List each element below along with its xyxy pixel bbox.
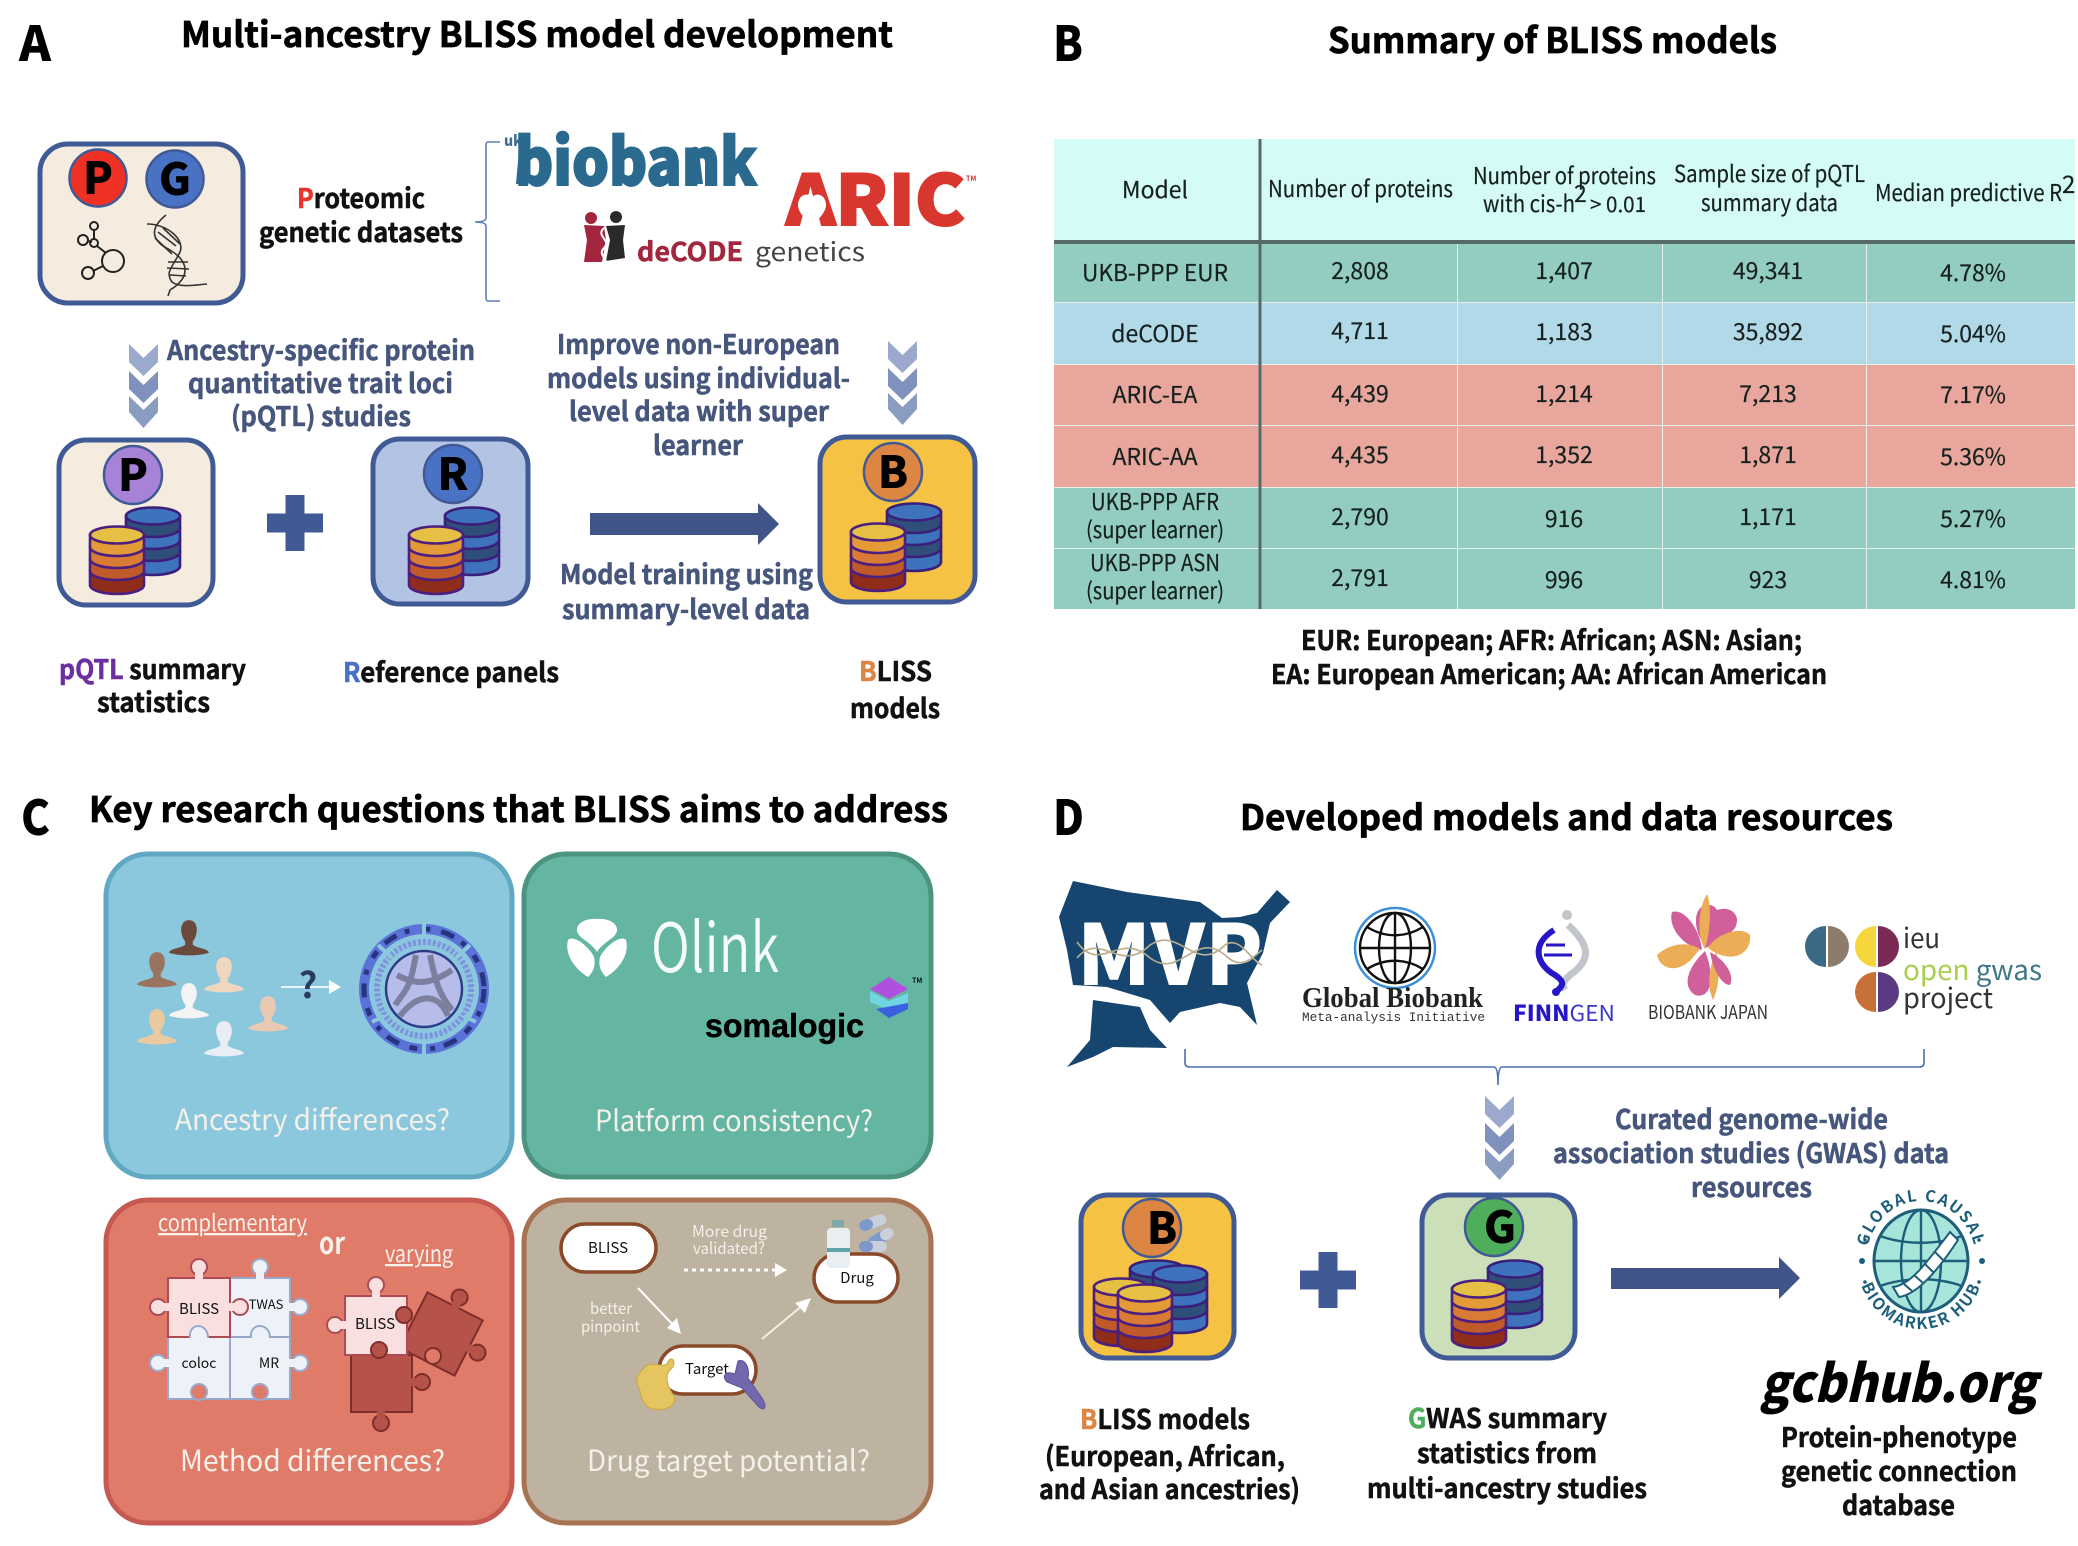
logo: ARIC: TM	[966, 174, 976, 184]
row ARIC-EA: 7.17%	[1940, 376, 2006, 410]
row UKB-PPP ASN: 996	[1545, 561, 1583, 595]
complementary label: complementary	[158, 1204, 307, 1238]
more drug validated label: More drug	[692, 1218, 767, 1242]
label: pQTL summary statistics	[59, 648, 246, 720]
chevrons down	[1485, 1096, 1514, 1180]
row UKB-PPP ASN: 4.81%	[1940, 561, 2006, 595]
row UKB-PPP EUR: 49,341	[1733, 252, 1803, 286]
logo: Olink: Olink	[651, 893, 779, 992]
database description: database	[1842, 1484, 1955, 1523]
logo: Global Causal Biomarker Hub	[1858, 1190, 1985, 1330]
dashed arrow	[684, 1263, 787, 1277]
row UKB-PPP AFR: 1,171	[1739, 498, 1797, 532]
more drug validated label: validated?	[693, 1235, 765, 1259]
panel D: models and resources	[1039, 779, 2043, 1523]
row UKB-PPP AFR	[1086, 483, 2006, 545]
logo: IEU open GWAS	[1805, 917, 2042, 1017]
label: GWAS summary statistics: statistics from	[1417, 1432, 1597, 1471]
GWAS icon card: G	[1484, 1192, 1516, 1256]
panel C: research questions	[21, 779, 948, 1523]
database description	[1781, 1416, 2017, 1523]
row UKB-PPP AFR: 5.27%	[1940, 500, 2006, 534]
logo: deCODE genetics: genetics	[755, 232, 865, 269]
card: platform consistency	[524, 854, 931, 1177]
jigsaw of four methods	[150, 1259, 308, 1400]
row deCODE: deCODE	[1111, 315, 1199, 349]
row UKB-PPP EUR	[1082, 252, 2006, 288]
website name: gcbhub.org	[1759, 1342, 2043, 1417]
BLISS icon card with four stacks	[1081, 1193, 1234, 1358]
text: model training: Model training using	[560, 553, 813, 592]
BLISS pill: BLISS	[588, 1237, 628, 1258]
better pinpoint label: pinpoint	[581, 1313, 640, 1337]
jigsaw of four methods: coloc	[182, 1353, 216, 1373]
row UKB-PPP EUR: 2,808	[1331, 252, 1389, 286]
label: BLISS models ancestries: and Asian ancestries)	[1039, 1468, 1300, 1507]
better pinpoint label	[581, 1295, 640, 1337]
jigsaw of four methods: BLISS	[179, 1298, 219, 1319]
icon: vial and capsules	[827, 1213, 896, 1268]
row ARIC-EA: 1,214	[1535, 375, 1593, 409]
text: improve non-European models	[547, 323, 850, 463]
caption: Method differences?	[180, 1438, 445, 1480]
row UKB-PPP AFR: 2,790	[1331, 498, 1389, 532]
row ARIC-AA: 1,871	[1739, 436, 1797, 470]
logo: SomaLogic: TM	[912, 976, 922, 986]
row UKB-PPP AFR: UKB-PPP AFR	[1091, 483, 1219, 517]
text: ancestry-specific pQTL studies: Ancestry-specific protein	[166, 329, 475, 368]
question arrow: ?	[299, 957, 317, 1009]
text: curated GWAS resources: resources	[1691, 1166, 1812, 1205]
target pill: Target	[685, 1358, 729, 1379]
label: GWAS summary statistics: GWAS summary	[1408, 1397, 1607, 1436]
panel A: model development	[18, 5, 976, 726]
text: model training	[560, 553, 813, 627]
label: BLISS models ancestries: (European, African,	[1045, 1435, 1285, 1474]
text: model training: summary-level data	[562, 588, 810, 627]
BLISS icon card with four stacks: B	[1147, 1193, 1177, 1257]
card: drug target potential	[524, 1200, 931, 1523]
logo: deCODE genetics: deCODE	[637, 232, 743, 269]
more drug validated label	[692, 1218, 767, 1259]
logo: IEU open GWAS: project	[1903, 977, 1993, 1017]
logo: FinnGen: FINNGEN	[1513, 996, 1615, 1028]
logo: Global Biobank	[1302, 908, 1485, 1025]
chevrons down left	[129, 344, 158, 428]
row UKB-PPP ASN: UKB-PPP ASN	[1090, 544, 1220, 578]
row UKB-PPP ASN	[1086, 544, 2006, 606]
row UKB-PPP ASN: 2,791	[1331, 559, 1389, 593]
table header: > 0.01	[1590, 189, 1646, 219]
people icons	[137, 920, 288, 1056]
BLISS pill	[561, 1224, 656, 1272]
circular genome plot	[364, 923, 484, 1056]
GWAS icon card	[1422, 1192, 1575, 1358]
table header: 2	[2062, 165, 2075, 200]
row deCODE: 5.04%	[1940, 315, 2006, 349]
reference panel icon card	[373, 439, 528, 604]
label: BLISS models: models	[850, 687, 940, 726]
label: proteomic genetic datasets	[259, 177, 463, 250]
logo: ARIC: ARIC	[785, 145, 965, 245]
database description: genetic connection	[1781, 1450, 2017, 1489]
table footnote: EA: European American; AA: African American	[1271, 653, 1827, 692]
text: ancestry-specific pQTL studies	[166, 329, 475, 434]
panel letter D: D	[1053, 779, 1084, 849]
drug pill: Drug	[840, 1267, 874, 1288]
label: proteomic genetic datasets: Proteomic	[297, 177, 425, 216]
logo: Global Causal Biomarker Hub: BIOMARKER HUB	[1862, 1282, 1979, 1330]
panel letter A: A	[18, 5, 52, 75]
table header	[1122, 155, 2075, 219]
row UKB-PPP EUR: 4.78%	[1940, 254, 2006, 288]
brace to dataset logos	[475, 142, 500, 301]
title B: Summary of BLISS models	[1328, 13, 1777, 64]
label: BLISS models ancestries	[1039, 1398, 1300, 1507]
drug pill	[814, 1254, 898, 1302]
row UKB-PPP EUR: 1,407	[1535, 252, 1593, 286]
title D: Developed models and data resources	[1240, 790, 1893, 841]
row UKB-PPP ASN: (super learner)	[1086, 572, 1224, 606]
caption: Drug target potential?	[587, 1438, 870, 1480]
label: BLISS models	[850, 650, 940, 726]
plus sign	[1300, 1252, 1356, 1308]
table footnote	[1271, 619, 1827, 692]
BLISS icon card	[820, 437, 975, 602]
BLISS icon card: B	[878, 437, 908, 501]
row ARIC-EA	[1113, 375, 2006, 410]
caption: Ancestry differences?	[175, 1097, 450, 1139]
logo: IEU open GWAS: ieu	[1903, 917, 1940, 957]
row ARIC-AA: ARIC-AA	[1112, 438, 1198, 472]
title C: Key research questions that BLISS aims to address	[89, 782, 948, 833]
or label: or	[319, 1219, 346, 1263]
logo: UK Biobank: biobank	[515, 112, 757, 204]
row ARIC-EA: 4,439	[1331, 375, 1389, 409]
mismatched jigsaw	[327, 1276, 507, 1431]
row UKB-PPP ASN: 923	[1749, 561, 1787, 595]
text: ancestry-specific pQTL studies: (pQTL) studies	[231, 395, 411, 434]
logo: SomaLogic	[705, 976, 922, 1044]
row UKB-PPP AFR: (super learner)	[1086, 511, 1224, 545]
arrow target to drug	[762, 1298, 811, 1339]
label: BLISS models ancestries: BLISS models	[1080, 1398, 1250, 1437]
label: GWAS summary statistics: multi-ancestry studies	[1367, 1467, 1647, 1506]
better pinpoint label: better	[590, 1295, 633, 1319]
table header: Number of proteins	[1268, 170, 1453, 204]
arrow to target	[638, 1288, 681, 1334]
arrow to BLISS	[590, 503, 779, 545]
panel letter B: B	[1053, 5, 1083, 75]
table footnote: EUR: European; AFR: African; ASN: Asian;	[1301, 619, 1802, 658]
pQTL icon card: P	[118, 440, 148, 504]
label: BLISS models: BLISS	[859, 650, 932, 689]
logo: UK Biobank: uk	[504, 130, 522, 151]
label: pQTL summary statistics: statistics	[97, 681, 210, 720]
jigsaw of four methods: MR	[259, 1353, 279, 1373]
table header: Model	[1122, 171, 1188, 205]
table header: Sample size of pQTL	[1674, 155, 1865, 189]
table header: Number of proteins	[1473, 157, 1656, 191]
table header: summary data	[1701, 184, 1838, 218]
logo: Global Causal Biomarker Hub: GLOBAL CAUSAL	[1858, 1190, 1984, 1244]
logo: Biobank Japan: BIOBANK JAPAN	[1648, 998, 1768, 1025]
pQTL icon card	[59, 440, 213, 605]
row UKB-PPP EUR: UKB-PPP EUR	[1082, 254, 1228, 288]
database description: Protein-phenotype	[1781, 1416, 2017, 1455]
caption: Platform consistency?	[595, 1098, 873, 1140]
row ARIC-EA: 7,213	[1739, 375, 1797, 409]
proteomic genetic icon card: G	[159, 144, 191, 208]
proteomic genetic icon card	[40, 143, 243, 303]
card: ancestry differences	[106, 854, 512, 1177]
logo: Olink	[567, 893, 779, 992]
text: improve non-European models: level data with super	[569, 390, 829, 429]
row ARIC-AA: 1,352	[1535, 436, 1593, 470]
logo: FinnGen	[1513, 910, 1615, 1028]
logo: SomaLogic: somalogic	[705, 1007, 864, 1044]
row ARIC-EA: ARIC-EA	[1113, 376, 1197, 410]
label: pQTL summary statistics: pQTL summary	[59, 648, 246, 687]
plus sign	[267, 495, 323, 551]
varying label: varying	[385, 1235, 453, 1269]
row ARIC-AA: 5.36%	[1940, 438, 2006, 472]
table header: with cis-h	[1483, 185, 1575, 219]
text: curated GWAS resources	[1553, 1098, 1949, 1205]
row deCODE	[1111, 312, 2006, 349]
logo: MVP map	[1059, 881, 1290, 1067]
question arrow	[281, 957, 341, 1009]
row ARIC-AA	[1112, 436, 2006, 472]
logo: Biobank Japan	[1648, 894, 1768, 1025]
text: ancestry-specific pQTL studies: quantitative trait loci	[188, 362, 453, 401]
row deCODE: 35,892	[1733, 313, 1803, 347]
label: GWAS summary statistics	[1367, 1397, 1647, 1506]
text: improve non-European models: Improve non-European	[557, 323, 840, 362]
logo: IEU open GWAS: open gwas	[1903, 949, 2042, 989]
arrow to hub	[1611, 1257, 1800, 1299]
text: improve non-European models: learner	[653, 424, 743, 463]
text: improve non-European models: models using individual-	[547, 357, 850, 396]
row UKB-PPP AFR: 916	[1545, 500, 1583, 534]
bracket over logos	[1185, 1049, 1924, 1085]
table header: 2	[1574, 175, 1587, 209]
text: curated GWAS resources: Curated genome-wide	[1615, 1098, 1888, 1137]
chevrons down right	[888, 341, 917, 425]
card: method differences	[106, 1200, 512, 1523]
proteomic genetic icon card: P	[83, 143, 113, 207]
text: curated GWAS resources: association studies (GWAS) data	[1553, 1132, 1949, 1171]
logo: deCODE genetics	[584, 211, 865, 269]
row deCODE: 1,183	[1535, 313, 1593, 347]
logo: Global Biobank: Meta-analysis Initiative	[1302, 1010, 1485, 1025]
label: proteomic genetic datasets: genetic datasets	[259, 211, 463, 250]
table	[1054, 139, 2075, 609]
title A: Multi-ancestry BLISS model development	[181, 7, 893, 58]
mismatched jigsaw: BLISS	[355, 1313, 395, 1334]
label: reference panels: Reference panels	[343, 651, 559, 690]
logo: MVP map: MVP	[1077, 889, 1263, 1010]
row ARIC-AA: 4,435	[1331, 436, 1389, 470]
logo: Global Biobank: Global Biobank	[1302, 983, 1483, 1014]
reference panel icon card: R	[437, 439, 469, 503]
panel letter C: C	[21, 779, 50, 849]
jigsaw of four methods: TWAS	[249, 1294, 284, 1313]
panel B: summary table	[1053, 5, 2075, 692]
row deCODE: 4,711	[1331, 312, 1389, 346]
target pill	[637, 1346, 765, 1410]
